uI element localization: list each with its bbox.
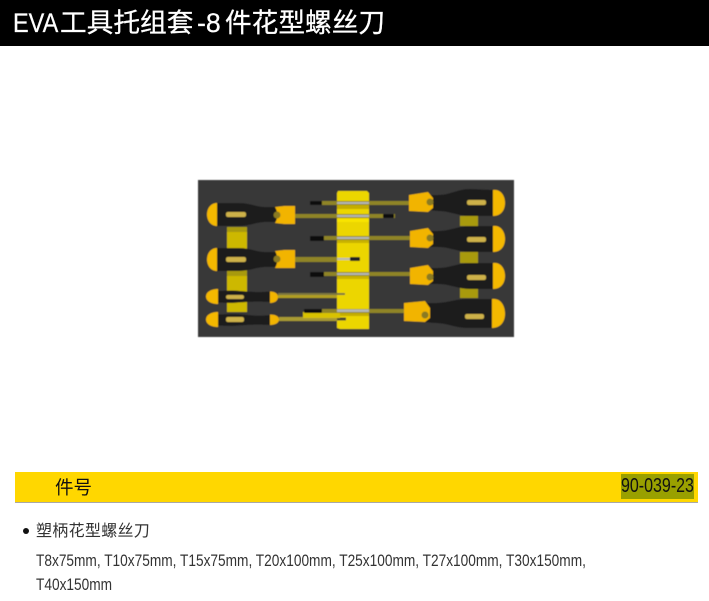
yellow holder: right notches bbox=[460, 216, 478, 298]
part number value: 90-039-23 bbox=[621, 475, 694, 497]
bullet bbox=[23, 528, 29, 534]
title: -8 bbox=[197, 8, 221, 38]
part number bar bbox=[15, 472, 698, 503]
title: 件花型螺丝刀 bbox=[225, 8, 385, 38]
yellow holder: left bbox=[227, 227, 247, 312]
specification list line 1: T8x75mm, T10x75mm, T15x75mm, T20x100mm, T25x100mm, T27x100mm, T30x150mm, bbox=[36, 551, 586, 570]
screwdriver left 1 bbox=[207, 203, 395, 226]
screwdriver left 4 bbox=[206, 312, 346, 327]
EVA foam tray bbox=[198, 180, 514, 337]
specification list line 2: T40x150mm bbox=[36, 575, 112, 594]
screwdriver right 4 bbox=[303, 299, 505, 328]
title: EVA bbox=[13, 8, 58, 38]
title: 工具托组套 bbox=[60, 8, 193, 38]
yellow holder: center bbox=[337, 191, 369, 329]
title bbox=[13, 8, 385, 38]
screwdriver left 3 bbox=[206, 289, 345, 304]
product name: 塑柄花型螺丝刀 bbox=[36, 523, 150, 540]
title bar bbox=[0, 0, 709, 46]
screwdriver right 3 bbox=[310, 263, 505, 289]
screwdriver right 1 bbox=[310, 189, 505, 216]
screwdriver right 2 bbox=[310, 226, 505, 252]
screwdriver left 2 bbox=[207, 248, 360, 271]
part number label: 件号 bbox=[55, 477, 92, 498]
